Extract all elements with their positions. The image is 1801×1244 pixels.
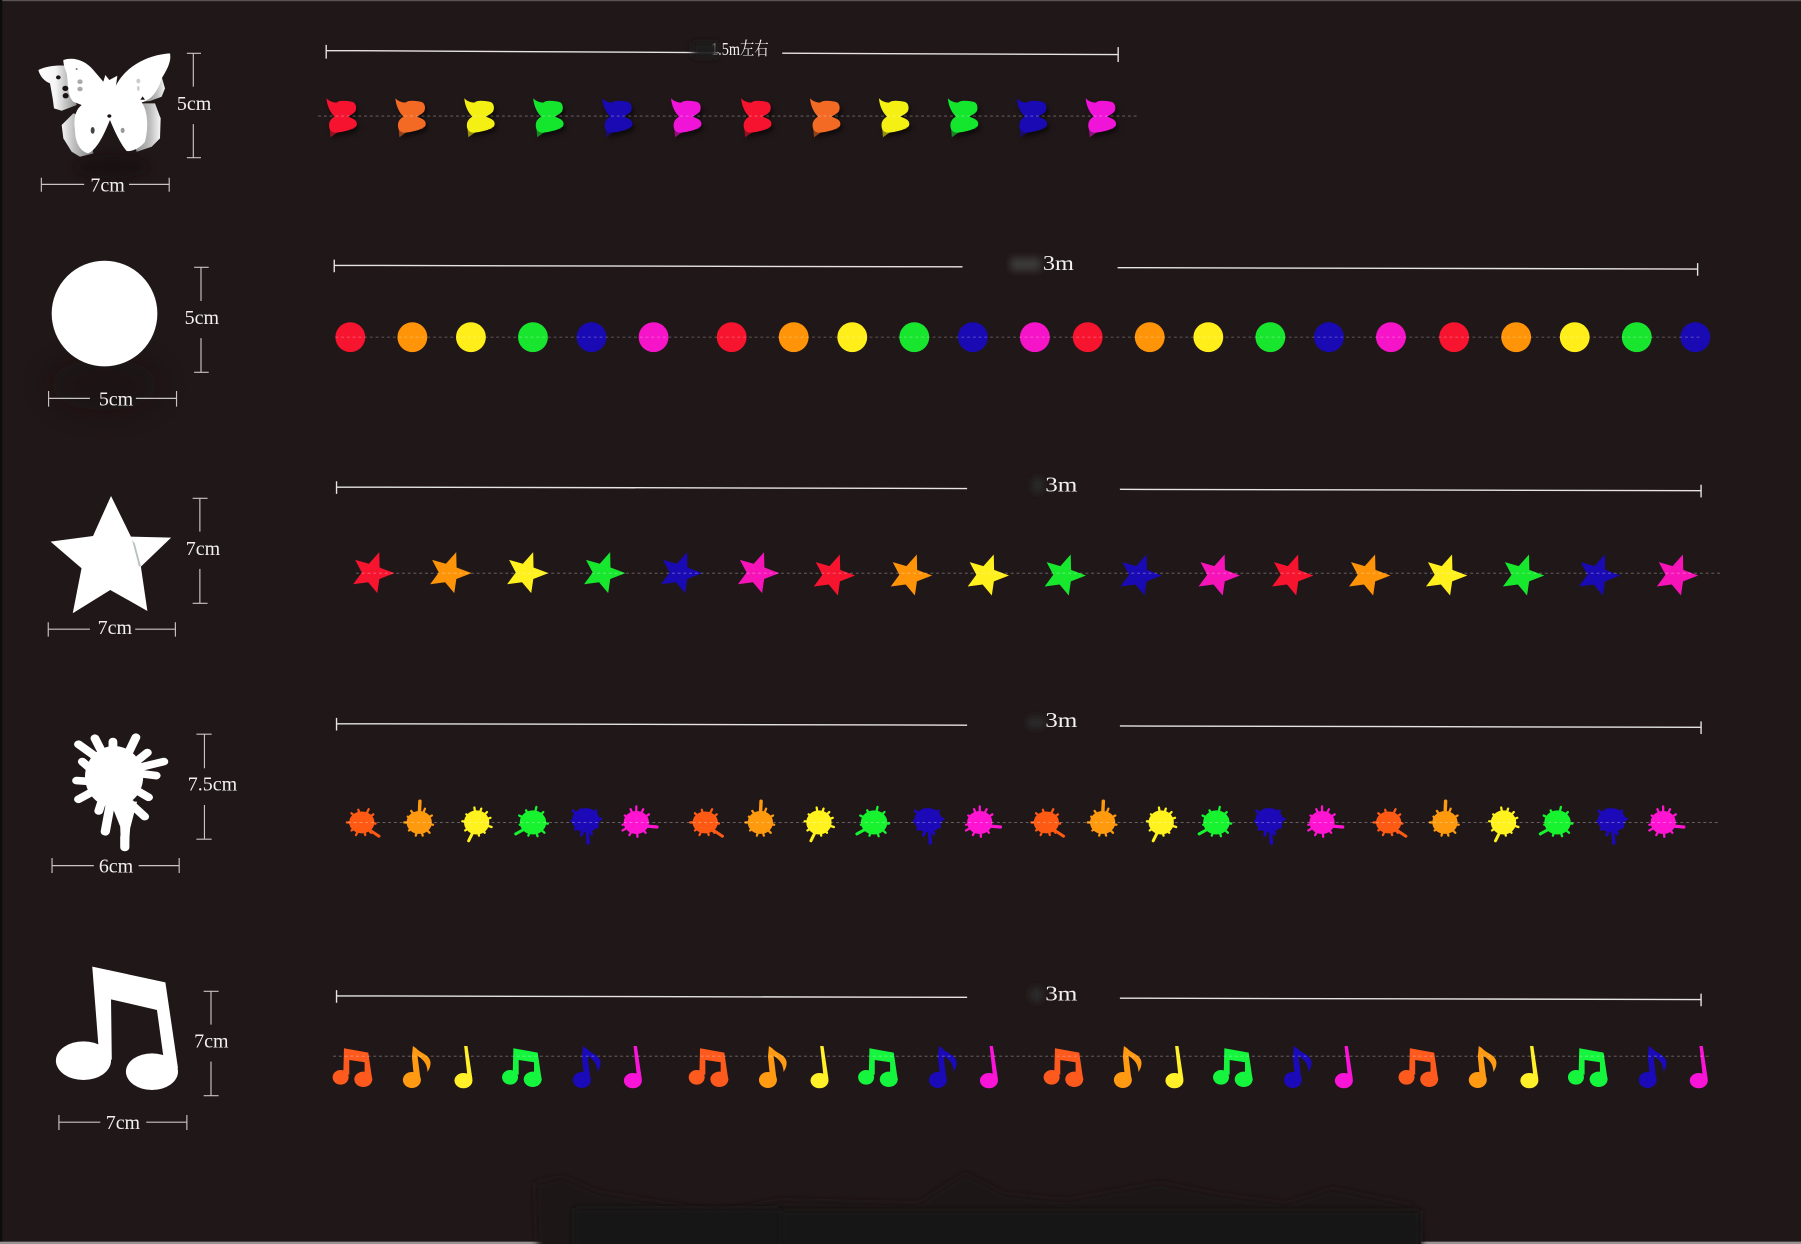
- dimension: circle height: 5cm: [185, 307, 219, 329]
- dimension: butterfly height: 5cm: [177, 93, 212, 115]
- smudge: bottom dark patch: [535, 1174, 1422, 1244]
- panel: butterfly garland row: [38, 38, 1137, 197]
- length bar: 3m: 3m: [1045, 475, 1077, 497]
- panel: music note garland row: [56, 967, 1711, 1134]
- splat garland: [347, 801, 1684, 843]
- length bar: 3m: [337, 983, 1701, 1006]
- panel: paint splat garland row: [52, 710, 1721, 878]
- dimension: butterfly width: 7cm: [90, 175, 125, 197]
- length bar: 3m: 3m: [1045, 710, 1077, 732]
- dimension: note width: [59, 1112, 187, 1134]
- icon: large white splat: [77, 737, 164, 848]
- icon: large white circle: [49, 261, 160, 410]
- dimension: splat height: 7.5cm: [188, 774, 238, 796]
- dimension: star height: 7cm: [186, 538, 221, 560]
- length bar: 3m: 3m: [1043, 253, 1074, 275]
- dimension: butterfly height: [177, 53, 212, 158]
- circle garland: [335, 322, 1710, 352]
- dimension: star height: [186, 498, 221, 603]
- length bar: 3m: [337, 710, 1701, 734]
- dimension: splat height: [188, 734, 238, 839]
- dimension: circle width: 5cm: [99, 388, 134, 410]
- panel: star garland row: [48, 475, 1721, 639]
- dimension: star width: 7cm: [98, 617, 133, 639]
- dimension: circle width: [49, 388, 177, 410]
- note garland: [333, 1046, 1708, 1088]
- length bar: 1.5m: [326, 38, 1118, 62]
- butterfly garland: [326, 98, 1116, 137]
- dimension: splat width: [52, 856, 179, 878]
- dimension: star width: [48, 617, 175, 639]
- dimension: butterfly width: [41, 175, 169, 197]
- star garland: [353, 552, 1698, 595]
- length bar: 1.5m: 1.5m左右: [711, 38, 769, 60]
- icon: large white butterfly: [38, 53, 170, 178]
- length bar: 3m: [334, 253, 1698, 276]
- dimension: note height: 7cm: [194, 1031, 229, 1053]
- length bar: 3m: [337, 475, 1701, 497]
- dimension: splat width: 6cm: [99, 856, 134, 878]
- icon: large white music note: [56, 967, 178, 1090]
- panel: circle garland row: [49, 253, 1710, 410]
- dimension: note width: 7cm: [106, 1112, 141, 1134]
- dimension: note height: [194, 991, 229, 1096]
- length bar: 3m: 3m: [1045, 983, 1077, 1005]
- icon: large white star: [51, 496, 171, 613]
- dimension: circle height: [185, 267, 219, 372]
